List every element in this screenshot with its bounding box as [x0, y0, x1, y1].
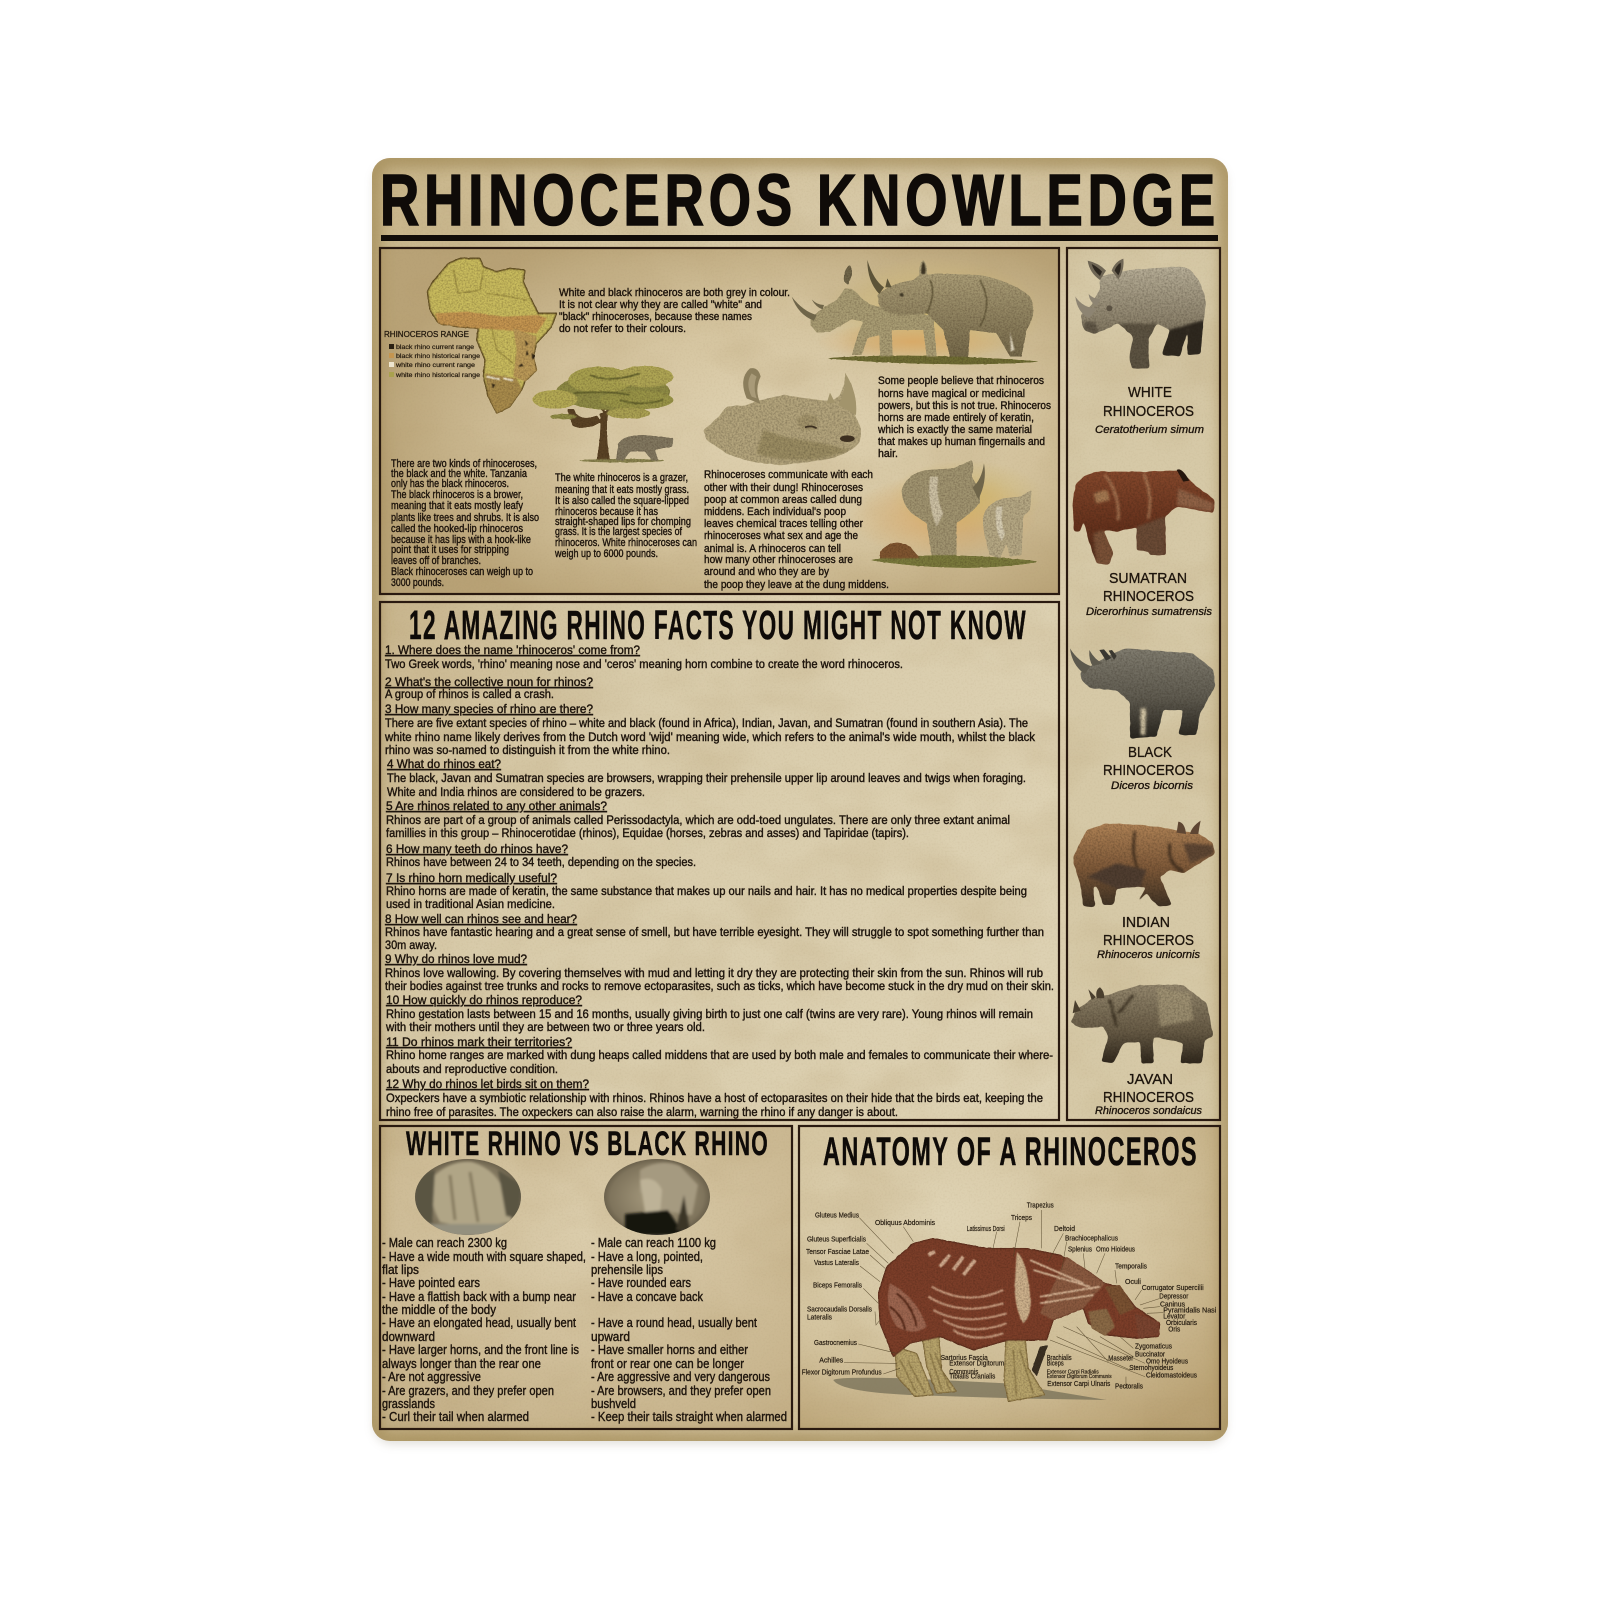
fact 5: Rhinos are part of a group of animals called Perissodactyla, which are odd-toed ungulates. There are only three extant animal	[386, 813, 1010, 827]
panel: white rhino vs black rhino	[380, 1125, 792, 1429]
fact 1	[385, 643, 903, 671]
text: colour note: "black" rhinoceroses, because these names	[559, 311, 752, 323]
fact 4: White and India rhinos are considered to be grazers.	[387, 785, 645, 799]
text: dung communication: poop at common areas called dung	[704, 494, 862, 506]
black rhino traits: - Keep their tails straight when alarmed	[591, 1410, 787, 1424]
text: dung communication: animal is. A rhinoceros can tell	[704, 543, 841, 555]
fact 2: 2 What's the collective noun for rhinos?	[385, 675, 593, 689]
muscle labels: Deltoid	[1054, 1226, 1075, 1233]
javan rhinoceros label: Rhinoceros sondaicus	[1095, 1105, 1203, 1117]
text: two kinds: the black and the white. Tanzania	[391, 468, 527, 480]
map legend	[384, 329, 481, 379]
black rhino traits: prehensile lips	[591, 1263, 663, 1277]
text: dung communication: the poop they leave at the dung middens.	[704, 579, 889, 591]
text: white rhino grazer: weigh up to 6000 pounds.	[554, 548, 658, 560]
muscle labels: Levator	[1163, 1313, 1186, 1320]
text: white rhino grazer	[554, 472, 697, 560]
white rhino traits: always longer than the rear one	[382, 1357, 541, 1371]
black rhinoceros label: BLACK	[1128, 745, 1172, 761]
anatomy heading: ANATOMY OF A RHINOCEROS	[823, 1130, 1198, 1174]
muscle labels: Cleidomastoideus	[1146, 1372, 1197, 1379]
fact 4: 4 What do rhinos eat?	[387, 757, 501, 771]
panel: rhino species	[1067, 248, 1220, 1120]
fact 5: famillies in this group – Rhinocerotidae (rhinos), Equidae (horses, zebras and asses) and Tapiridae (tapirs).	[386, 826, 909, 840]
fact 3: white rhino name likely derives from the Dutch word 'wijd' meaning wide, which refers to the animal's wide mouth, whilst the black	[384, 730, 1036, 744]
photo: white rhino	[415, 1159, 525, 1236]
text: white rhino grazer: straight-shaped lips for chomping	[555, 516, 691, 528]
muscle labels: Orbicularis	[1166, 1320, 1197, 1327]
muscle labels: Gluteus Superficialis	[807, 1237, 866, 1244]
text: two kinds: There are two kinds of rhinoceroses,	[391, 458, 537, 470]
text: horns: that makes up human fingernails and	[878, 436, 1045, 448]
panel: anatomy of a rhinoceros	[799, 1126, 1220, 1429]
sumatran rhinoceros label: SUMATRAN	[1109, 571, 1187, 587]
text: white rhino grazer: rhinoceros because it has	[555, 506, 658, 518]
text: horns: hair.	[878, 448, 898, 460]
fact 6: Rhinos have between 24 to 34 teeth, depending on the species.	[386, 855, 696, 869]
text: dung communication: rhinoceroses what sex and age the	[704, 530, 858, 542]
text: colour note: do not refer to their colours.	[559, 323, 686, 335]
white rhino traits: - Are grazers, and they prefer open	[382, 1384, 554, 1398]
fact 3: rhino was so-named to distinguish it from the white rhino.	[385, 743, 670, 757]
muscle labels: Depressor	[1159, 1294, 1189, 1301]
black rhino traits: upward	[591, 1330, 630, 1344]
muscle labels: Pectoralis	[1115, 1383, 1143, 1390]
text: two kinds: called the hooked-lip rhinoceros	[391, 523, 523, 535]
black rhino traits: - Have smaller horns and either	[591, 1343, 748, 1357]
text: two kinds: 3000 pounds.	[391, 577, 444, 589]
muscle labels: Zygomaticus	[1135, 1343, 1172, 1350]
muscle labels: Sartorius Fascia	[941, 1355, 988, 1362]
fact 6	[386, 842, 696, 869]
muscle labels: Temporalis	[1115, 1263, 1147, 1270]
white rhino traits: - Are not aggressive	[382, 1370, 481, 1384]
fact 7	[386, 871, 1027, 911]
fact 7: 7 Is rhino horn medically useful?	[386, 871, 557, 885]
fact 10: 10 How quickly do rhinos reproduce?	[386, 993, 582, 1007]
fact 10	[385, 993, 1033, 1034]
muscle labels: Biceps	[1047, 1361, 1064, 1368]
text: dung communication	[704, 469, 889, 591]
black rhino traits: - Male can reach 1100 kg	[591, 1236, 716, 1250]
muscle labels: Extensor Digitorum Communis	[1047, 1374, 1112, 1380]
muscle labels: Caninus	[1160, 1302, 1185, 1309]
black rhinoceros illustration	[1070, 648, 1215, 738]
white rhino traits: - Have a wide mouth with square shaped,	[382, 1250, 586, 1264]
fact 4: The black, Javan and Sumatran species are browsers, wrapping their prehensile upper lip around leaves and twigs when foraging.	[387, 771, 1026, 785]
muscle labels: Flexor Digitorum Profundus	[802, 1369, 882, 1376]
muscle labels: Extensor Carpi Radialis	[1047, 1369, 1099, 1375]
text: two kinds: leaves off of branches.	[391, 555, 481, 567]
black rhinoceros label: Diceros bicornis	[1111, 780, 1194, 792]
muscle labels: Oculi	[1125, 1279, 1141, 1286]
white rhino traits: - Curl their tail when alarmed	[382, 1410, 529, 1424]
text: white rhino grazer: meaning that it eats mostly grass.	[555, 484, 689, 496]
text: two kinds: meaning that it eats mostly leafy	[391, 500, 524, 512]
muscle labels: Vastus Lateralis	[814, 1260, 859, 1267]
javan rhinoceros illustration	[1070, 985, 1213, 1063]
fact 7: used in traditional Asian medicine.	[386, 897, 555, 911]
indian rhinoceros label: INDIAN	[1122, 915, 1170, 931]
sumatran rhinoceros label: RHINOCEROS	[1103, 589, 1194, 605]
sumatran rhinoceros label	[1086, 571, 1213, 618]
text: two kinds: point that it uses for stripping	[391, 544, 509, 556]
fact 7: Rhino horns are made of keratin, the same substance that makes up our nails and hair. It has no medical properties despite being	[386, 884, 1027, 898]
white rhino traits: - Have pointed ears	[382, 1276, 480, 1290]
black rhino traits: - Are browsers, and they prefer open	[591, 1384, 771, 1398]
white rhino traits: - Have larger horns, and the front line is	[382, 1343, 579, 1357]
white rhino traits	[382, 1236, 586, 1424]
muscle labels: Extensor Digitorum	[949, 1361, 1004, 1368]
text: horns: powers, but this is not true. Rhinoceros	[878, 400, 1051, 412]
muscle labels: Lateralis	[807, 1314, 832, 1321]
muscle labels: Buccinator	[1135, 1352, 1166, 1359]
muscle labels: Masseter	[1108, 1356, 1134, 1363]
text: dung communication: other with their dung! Rhinoceroses	[704, 482, 863, 494]
fact 5: 5 Are rhinos related to any other animals?	[386, 799, 607, 813]
fact 12	[386, 1077, 1043, 1119]
fact 8	[385, 912, 1044, 952]
fact 6: 6 How many teeth do rhinos have?	[386, 842, 568, 856]
muscle labels: Obliquus Abdominis	[875, 1220, 935, 1227]
fact 9: their bodies against tree trunks and rocks to remove ectoparasites, such as ticks, which have become stuck in the dry mud on their skin.	[385, 979, 1054, 993]
fact 2	[385, 675, 593, 701]
muscle labels: Communis	[949, 1369, 979, 1376]
text: horns: Some people believe that rhinoceros	[878, 375, 1044, 387]
white rhinoceros label: Ceratotherium simum	[1095, 424, 1204, 436]
fact 11: Rhino home ranges are marked with dung heaps called middens that are used by both male and females to communicate their where-	[386, 1048, 1053, 1062]
black rhino traits: - Have a long, pointed,	[591, 1250, 703, 1264]
white rhinoceros label: RHINOCEROS	[1103, 404, 1194, 420]
muscle labels: Brachialis	[1047, 1355, 1072, 1362]
muscle labels	[802, 1203, 1217, 1390]
fact 3	[384, 702, 1036, 757]
text: horns: horns are made entirely of keratin,	[878, 412, 1034, 424]
text: two kinds: Black rhinoceroses can weigh up to	[391, 566, 533, 578]
black rhino traits: bushveld	[591, 1397, 636, 1411]
text: two kinds	[391, 458, 539, 589]
muscle labels: Tibialis Cranialis	[949, 1374, 996, 1381]
text: horns: which is exactly the same material	[877, 424, 1032, 436]
javan rhinoceros label: RHINOCEROS	[1103, 1090, 1194, 1106]
sumatran rhinoceros illustration	[1073, 469, 1215, 565]
text: dung communication: middens. Each individual's poop	[704, 506, 846, 518]
text: two kinds: plants like trees and shrubs. It is also	[391, 512, 539, 524]
map legend: RHINOCEROS RANGE	[384, 329, 469, 339]
fact 11	[386, 1035, 1053, 1076]
plate shadow	[374, 164, 1226, 1444]
muscle labels: Omo Hioideus	[1096, 1246, 1135, 1253]
muscle labels: Gastrocnemius	[814, 1340, 857, 1347]
muscle labels: Corrugator Supercilii	[1142, 1285, 1204, 1292]
muscle labels: Sacrocaudalis Dorsalis	[807, 1307, 872, 1314]
fact 3: 3 How many species of rhino are there?	[385, 702, 593, 716]
panel: 12 amazing facts	[380, 602, 1059, 1120]
white rhinoceros label	[1095, 385, 1204, 436]
fact 9: 9 Why do rhinos love mud?	[385, 952, 527, 966]
sumatran rhinoceros label: Dicerorhinus sumatrensis	[1086, 606, 1213, 618]
fact 1: 1. Where does the name 'rhinoceros' come from?	[385, 643, 640, 657]
map of Africa	[427, 258, 557, 413]
fact 10: Rhino gestation lasts between 15 and 16 months, usually giving birth to just one calf (twins are very rare). Young rhinos will remain	[386, 1007, 1033, 1021]
muscle labels: Biceps Femoralis	[813, 1283, 862, 1290]
black rhino traits: - Are aggressive and very dangerous	[591, 1370, 770, 1384]
photo: black rhino	[604, 1159, 710, 1235]
facts heading: 12 AMAZING RHINO FACTS YOU MIGHT NOT KNOW	[409, 602, 1027, 648]
black rhino traits	[591, 1236, 787, 1424]
muscle labels: Achilles	[819, 1358, 844, 1365]
illustration: acacia tree and small rhino	[532, 366, 673, 462]
background plate	[372, 158, 1228, 1441]
illustration: rhinos from behind	[850, 460, 1043, 568]
muscle labels: Omo Hyoideus	[1146, 1358, 1188, 1365]
fact 11: abouts and reproductive condition.	[386, 1062, 558, 1076]
title: RHINOCEROS KNOWLEDGE	[380, 161, 1220, 241]
text: colour note: It is not clear why they are called "white" and	[559, 299, 762, 311]
text: white rhino grazer: The white rhinoceros is a grazer,	[555, 472, 688, 484]
white rhinoceros illustration	[1075, 259, 1206, 368]
muscle labels: Brachiocephalicus	[1065, 1236, 1118, 1243]
map legend: black rhino historical range	[396, 353, 481, 360]
white rhino traits: grasslands	[382, 1397, 435, 1411]
muscle labels: Gluteus Medius	[815, 1213, 859, 1220]
map legend: black rhino current range	[396, 344, 475, 351]
white rhinoceros label: WHITE	[1128, 385, 1172, 401]
fact 3: There are five extant species of rhino – white and black (found in Africa), Indian, Javan, and Sumatran (found in southern Asia). The	[385, 716, 1028, 730]
indian rhinoceros label: Rhinoceros unicornis	[1097, 949, 1201, 961]
white rhino traits: - Have an elongated head, usually bent	[382, 1316, 576, 1330]
fact 12: rhino free of parasites. The oxpeckers can also raise the alarm, warning the rhino if any danger is about.	[386, 1105, 898, 1119]
text: colour note: White and black rhinoceros are both grey in colour.	[559, 287, 790, 299]
fact 8: Rhinos have fantastic hearing and a great sense of smell, but have terrible eyesight. They will struggle to spot something further than	[385, 925, 1044, 939]
text: white rhino grazer: It is also called the square-lipped	[555, 495, 689, 507]
illustration: rhino head	[703, 368, 861, 465]
map legend: white rhino current range	[395, 362, 476, 369]
map legend: white rhino historical range	[395, 372, 481, 379]
indian rhinoceros label: RHINOCEROS	[1103, 933, 1194, 949]
anatomical rhino drawing	[833, 1210, 1163, 1402]
black rhinoceros label: RHINOCEROS	[1103, 763, 1194, 779]
fact 8: 8 How well can rhinos see and hear?	[385, 912, 577, 926]
muscle labels: Sternohyoideus	[1129, 1365, 1174, 1372]
javan rhinoceros label	[1095, 1072, 1203, 1117]
muscle labels: Triceps	[1011, 1215, 1032, 1222]
white rhino traits: - Have a flattish back with a bump near	[382, 1290, 576, 1304]
indian rhinoceros label	[1097, 915, 1201, 961]
fact 2: A group of rhinos is called a crash.	[385, 687, 554, 701]
fact 5	[386, 799, 1010, 840]
black rhino traits: - Have a round head, usually bent	[591, 1316, 757, 1330]
muscle labels: Oris	[1168, 1327, 1181, 1334]
text: horns: horns have magical or medicinal	[878, 388, 1025, 400]
white rhino traits: the middle of the body	[382, 1303, 497, 1317]
muscle labels: Splenius	[1068, 1246, 1092, 1253]
muscle labels: Trapezius	[1027, 1203, 1054, 1210]
text: dung communication: around and who they are by	[704, 566, 830, 578]
black rhino traits: front or rear one can be longer	[591, 1357, 744, 1371]
title rule	[381, 235, 1218, 241]
text: dung communication: Rhinoceroses communicate with each	[704, 469, 873, 481]
fact 9: Rhinos love wallowing. By covering themselves with mud and letting it dry they are protecting their skin from the sun. Rhinos will rub	[385, 966, 1043, 980]
black rhino traits: - Have rounded ears	[591, 1276, 691, 1290]
panel: rhinoceros overview	[380, 248, 1059, 594]
fact 11: 11 Do rhinos mark their territories?	[386, 1035, 572, 1049]
muscle labels: Latissimus Dorsi	[967, 1226, 1005, 1233]
text: two kinds: because it has lips with a hook-like	[391, 534, 531, 546]
muscle labels: Tensor Fasciae Latae	[806, 1249, 869, 1256]
text: horns	[877, 375, 1051, 460]
text: white rhino grazer: grass. It is the largest species of	[555, 526, 682, 538]
text: two kinds: The black rhinoceros is a brower,	[391, 489, 523, 501]
muscle labels: Extensor Carpi Ulnaris	[1047, 1381, 1111, 1388]
comparison heading: WHITE RHINO VS BLACK RHINO	[406, 1125, 769, 1163]
text: colour note	[559, 287, 790, 335]
fact 9	[385, 952, 1054, 993]
fact 8: 30m away.	[385, 938, 437, 952]
indian rhinoceros illustration	[1073, 821, 1215, 907]
fact 12: 12 Why do rhinos let birds sit on them?	[386, 1077, 589, 1091]
javan rhinoceros label: JAVAN	[1127, 1072, 1173, 1088]
black rhinoceros label	[1103, 745, 1194, 792]
fact 10: with their mothers until they are between two or three years old.	[385, 1020, 705, 1034]
fact 1: Two Greek words, 'rhino' meaning nose and 'ceros' meaning horn combine to create the word rhinoceros.	[385, 657, 903, 671]
black rhino traits: - Have a concave back	[591, 1290, 704, 1304]
fact 12: Oxpeckers have a symbiotic relationship with rhinos. Rhinos have a host of ectoparasites on their hide that the birds eat, keeping the	[386, 1091, 1043, 1105]
white rhino traits: - Male can reach 2300 kg	[382, 1236, 507, 1250]
white rhino traits: downward	[382, 1330, 435, 1344]
text: dung communication: leaves chemical traces telling other	[704, 518, 863, 530]
text: two kinds: only has the black rhinoceros.	[391, 478, 509, 490]
white rhino traits: flat lips	[382, 1263, 419, 1277]
illustration: pair of rhinos	[792, 257, 1043, 370]
text: white rhino grazer: rhinoceros. White rhinoceroses can	[555, 537, 697, 549]
muscle labels: Pyramidalis Nasi	[1163, 1308, 1217, 1315]
fact 4	[387, 757, 1026, 799]
text: dung communication: how many other rhinoceroses are	[704, 554, 853, 566]
